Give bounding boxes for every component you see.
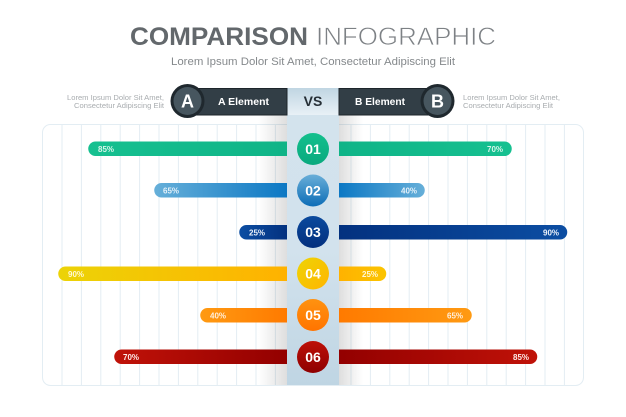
row 5 bars: [200, 308, 472, 322]
row 4 bars: 90%: [68, 270, 84, 279]
number badge 06: 06: [305, 349, 321, 365]
number badge 03: [297, 216, 329, 248]
row 5 bars: 40%: [210, 312, 226, 320]
row 5 bars: 65%: [447, 312, 463, 320]
left caption: Consectetur Adipiscing Elit: [74, 101, 165, 110]
number badge 04: 04: [305, 266, 321, 282]
A element header: [170, 84, 287, 118]
row 1 bars: [88, 142, 512, 156]
left caption: [67, 93, 165, 110]
row 3 bars: [239, 225, 567, 240]
number badge 02: [297, 174, 329, 206]
A element header: A Element: [218, 96, 269, 108]
row 1 bars: 85%: [98, 145, 114, 154]
row 2 bars: [154, 183, 425, 198]
left caption: Lorem Ipsum Dolor Sit Amet,: [67, 93, 164, 102]
row 2 bars: 40%: [401, 186, 417, 196]
icon: A badge: A: [181, 92, 194, 112]
B element header: [339, 84, 454, 118]
right caption: Consectetur Adipiscing Elit: [463, 101, 554, 110]
title: INFOGRAPHIC: [316, 23, 496, 51]
number badge 02: 02: [305, 182, 321, 198]
right caption: [463, 93, 560, 110]
number badge 03: 03: [305, 224, 321, 240]
subtitle: Lorem Ipsum Dolor Sit Amet, Consectetur Adipiscing Elit: [171, 56, 455, 68]
VS header: [287, 88, 339, 115]
row 1 bars: 70%: [487, 145, 503, 154]
center column: [287, 115, 339, 385]
number badge 01: [297, 133, 329, 165]
B element header: B Element: [355, 96, 405, 108]
row 2 bars: 65%: [163, 186, 179, 196]
number badge 04: [297, 258, 329, 290]
right caption: Lorem Ipsum Dolor Sit Amet,: [463, 93, 560, 102]
column shadows: [258, 115, 363, 385]
row 6 bars: 70%: [123, 353, 139, 362]
row 4 bars: 25%: [362, 270, 378, 279]
title: COMPARISON: [130, 23, 308, 51]
number badge 01: 01: [305, 141, 321, 157]
VS header: VS: [304, 93, 322, 109]
number badge 06: [297, 341, 329, 373]
row 6 bars: [114, 350, 537, 364]
panel: chart background grid: [42, 124, 584, 386]
number badge 05: 05: [305, 307, 321, 323]
row 6 bars: 85%: [513, 353, 529, 362]
number badge 05: [297, 299, 329, 331]
icon: B badge: B: [431, 92, 444, 112]
row 3 bars: 90%: [543, 228, 559, 238]
row 4 bars: [58, 266, 386, 281]
title: [130, 23, 496, 51]
row 3 bars: 25%: [249, 228, 265, 238]
